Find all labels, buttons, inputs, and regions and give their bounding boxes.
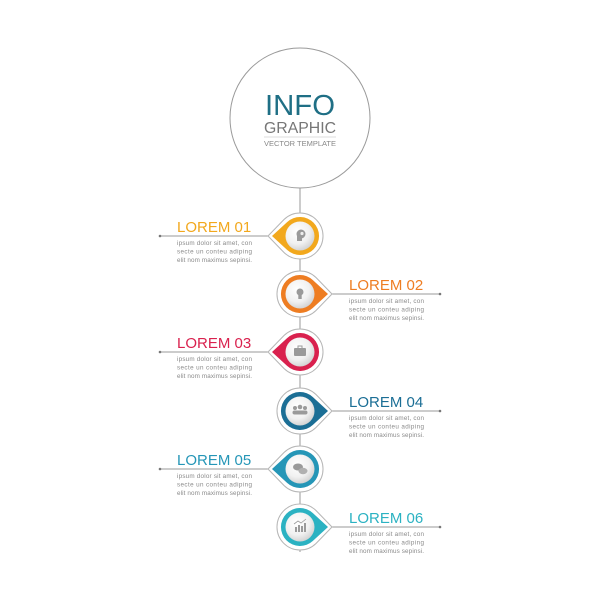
heading 02: LOREM 02 bbox=[349, 277, 423, 294]
text 03: ipsum dolor sit amet, con bbox=[177, 356, 252, 363]
step 01: elit nom maximus sepinsi. bbox=[177, 257, 252, 264]
text 06: ipsum dolor sit amet, con bbox=[349, 531, 424, 538]
vertical connector line bbox=[299, 187, 301, 552]
step 03 bbox=[159, 329, 323, 380]
text 05: ipsum dolor sit amet, con bbox=[177, 473, 252, 480]
step 03: elit nom maximus sepinsi. bbox=[177, 373, 252, 380]
step 05: elit nom maximus sepinsi. bbox=[177, 490, 252, 497]
step 06: secte un conteu adiping bbox=[349, 540, 424, 546]
step 05: secte un conteu adiping bbox=[177, 482, 252, 488]
step 06: elit nom maximus sepinsi. bbox=[349, 548, 424, 555]
icon: bulb bbox=[296, 288, 304, 299]
text 01: ipsum dolor sit amet, con bbox=[177, 240, 252, 247]
heading 01: LOREM 01 bbox=[177, 219, 251, 236]
step 03: secte un conteu adiping bbox=[177, 364, 252, 372]
heading 05: LOREM 05 bbox=[177, 452, 251, 469]
subtitle: GRAPHIC: GRAPHIC bbox=[264, 120, 336, 137]
heading 06: LOREM 06 bbox=[349, 510, 423, 527]
title: INFO: INFO bbox=[265, 90, 335, 122]
step 04: secte un conteu adiping bbox=[349, 424, 424, 430]
step 02: elit nom maximus sepinsi. bbox=[349, 315, 424, 322]
step 02: secte un conteu adiping bbox=[349, 306, 424, 314]
icon: chart bbox=[294, 519, 306, 532]
icon: briefcase bbox=[294, 346, 306, 356]
title circle bbox=[230, 48, 370, 188]
step 05 bbox=[159, 446, 323, 497]
text 04: ipsum dolor sit amet, con bbox=[349, 415, 424, 422]
heading 03: LOREM 03 bbox=[177, 335, 251, 352]
step 06 bbox=[277, 504, 441, 555]
icon: people bbox=[292, 405, 308, 414]
step 01: secte un conteu adiping bbox=[177, 248, 252, 256]
heading 04: LOREM 04 bbox=[349, 394, 423, 411]
step 01 bbox=[159, 213, 323, 264]
icon: head bbox=[296, 230, 306, 241]
step 02 bbox=[277, 271, 441, 322]
subtitle: VECTOR TEMPLATE: VECTOR TEMPLATE bbox=[264, 141, 336, 148]
step 04: elit nom maximus sepinsi. bbox=[349, 432, 424, 439]
icon: chat bubbles bbox=[293, 464, 308, 474]
text 02: ipsum dolor sit amet, con bbox=[349, 298, 424, 305]
step 04 bbox=[277, 388, 441, 439]
